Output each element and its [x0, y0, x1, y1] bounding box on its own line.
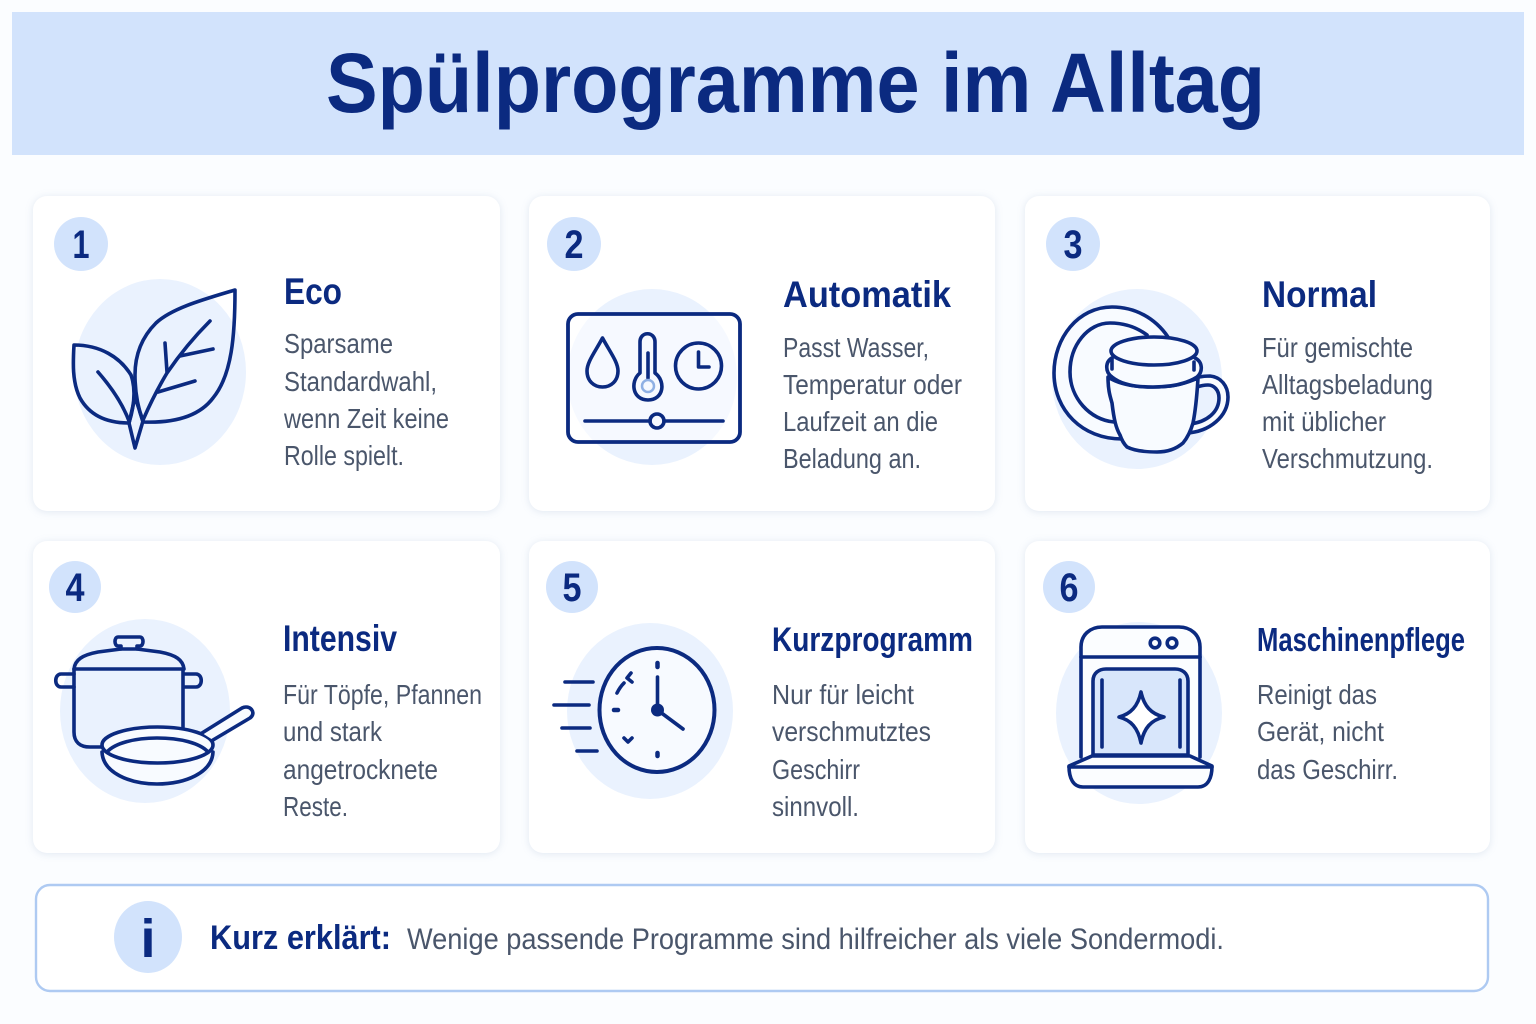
description: Eco: [283, 328, 449, 471]
description: Normal: Alltagsbeladung: [1262, 369, 1433, 400]
heading: Intensiv: Intensiv: [283, 618, 397, 659]
badge 3: 3: [1064, 223, 1082, 267]
description: Automatik: Passt Wasser,: [783, 332, 929, 363]
description: Automatik: Temperatur oder: [783, 369, 962, 400]
description: Normal: Verschmutzung.: [1262, 443, 1433, 474]
icon: info: i: [140, 909, 156, 969]
badge 5: 5: [562, 566, 582, 610]
heading: Kurzprogramm: Kurzprogramm: [772, 621, 973, 659]
description: Maschinenpflege: das Geschirr.: [1257, 754, 1398, 785]
heading: Normal: Normal: [1262, 274, 1377, 315]
icon: dishwasher: [1056, 622, 1222, 804]
description: Kurzprogramm: [772, 679, 931, 822]
description: Eco: Rolle spielt.: [284, 440, 404, 471]
panel: Automatik: [529, 196, 995, 511]
badge 6: 6: [1060, 566, 1078, 610]
badge 2: [547, 217, 601, 271]
panel: Intensiv: [33, 541, 500, 853]
heading: Automatik: Automatik: [783, 274, 951, 315]
badge 1: 1: [72, 223, 90, 267]
description: Automatik: Laufzeit an die: [783, 406, 938, 437]
description: Eco: Standardwahl,: [284, 366, 437, 397]
description: Intensiv: und stark: [283, 716, 382, 747]
description: Automatik: [783, 332, 962, 474]
description: Eco: wenn Zeit keine: [283, 403, 449, 434]
callout text: Wenige passende Programme sind hilfreicher als viele Sondermodi.: [407, 923, 1224, 956]
description: Maschinenpflege: [1257, 679, 1398, 785]
panel: Normal: [1025, 196, 1490, 511]
description: Normal: Für gemischte: [1262, 332, 1413, 363]
description: Normal: [1262, 332, 1433, 474]
description: Intensiv: angetrocknete: [283, 754, 438, 785]
description: Kurzprogramm: Nur für leicht: [772, 679, 914, 710]
heading: Maschinenpflege: Maschinenpflege: [1257, 621, 1465, 658]
icon: plate and cup: [1052, 289, 1228, 469]
description: Automatik: Beladung an.: [783, 443, 921, 474]
icon: control panel: [567, 289, 740, 465]
badge 1: [54, 217, 108, 271]
callout label: Kurz erklärt:: [210, 919, 391, 957]
badge 3: [1046, 217, 1100, 271]
title: Spülprogramme im Alltag: [326, 36, 1265, 130]
description: Kurzprogramm: verschmutztes: [772, 716, 931, 747]
description: Intensiv: Reste.: [283, 791, 348, 822]
badge 2: 2: [564, 223, 584, 267]
icon: leaves: [73, 279, 246, 465]
panel: Eco: [33, 196, 500, 511]
description: Maschinenpflege: Gerät, nicht: [1257, 716, 1384, 747]
description: Maschinenpflege: Reinigt das: [1257, 679, 1377, 710]
description: Intensiv: Für Töpfe, Pfannen: [283, 679, 482, 710]
description: Intensiv: [283, 679, 482, 822]
panel: Kurzprogramm: [529, 541, 995, 853]
description: Eco: Sparsame: [284, 328, 393, 359]
description: Kurzprogramm: sinnvoll.: [772, 791, 859, 822]
badge 5: [546, 561, 598, 613]
badge 6: [1043, 561, 1095, 613]
description: Kurzprogramm: Geschirr: [772, 754, 860, 785]
panel: Maschinenpflege: [1025, 541, 1490, 853]
callout: Kurz erklärt: [36, 885, 1488, 991]
badge 4: 4: [66, 566, 85, 610]
icon: pot and pan: [56, 619, 253, 803]
header band: [12, 12, 1524, 155]
icon: info: [114, 901, 182, 973]
badge 4: [49, 561, 101, 613]
heading: Eco: Eco: [284, 271, 342, 312]
description: Normal: mit üblicher: [1262, 406, 1386, 437]
icon: fast clock: [554, 623, 733, 799]
